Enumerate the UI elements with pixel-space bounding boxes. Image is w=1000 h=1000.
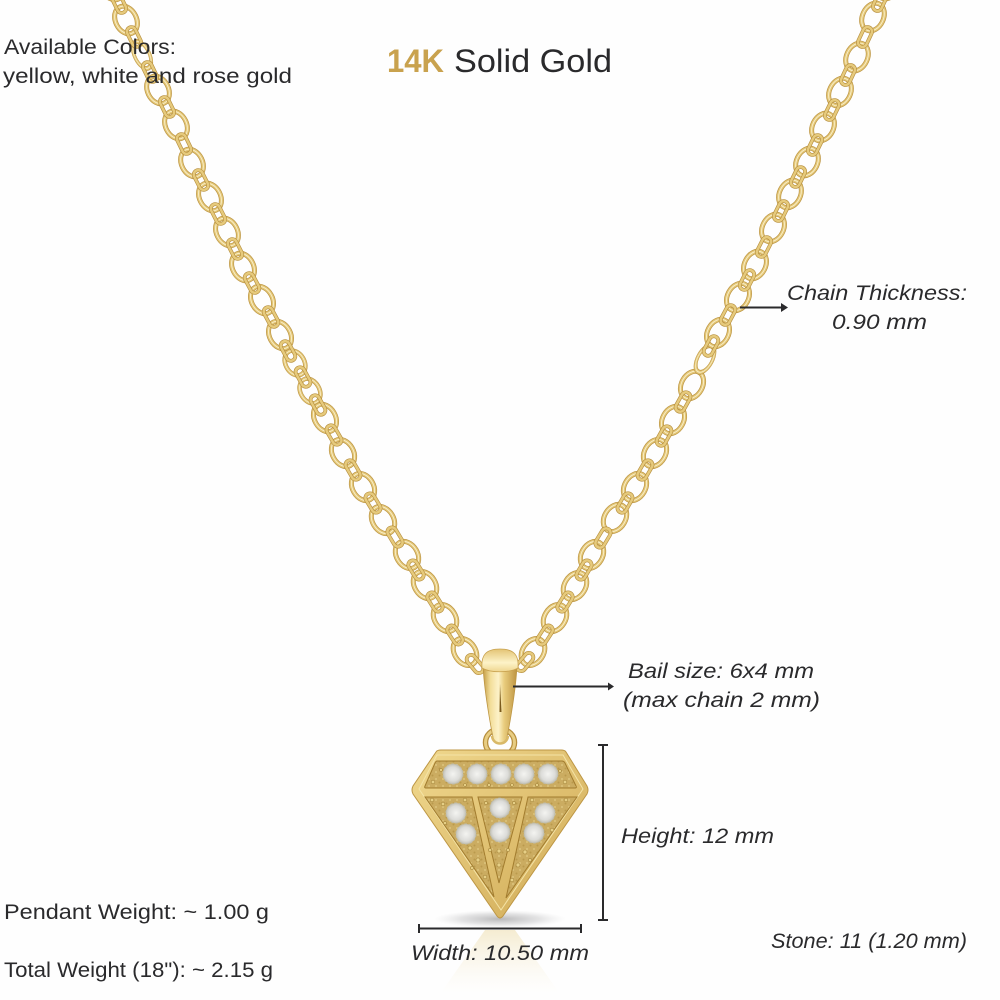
- right panel: [506, 797, 577, 898]
- total weight: Total Weight (18"): ~ 2.15 g: [4, 959, 273, 982]
- pendant shadow: [434, 910, 566, 928]
- bail: [483, 665, 517, 744]
- available colors: Available Colors:: [4, 36, 176, 59]
- panel beads: [430, 768, 568, 882]
- stone label: Stone: 11 (1.20 mm): [771, 930, 967, 953]
- height dimension: [598, 745, 608, 920]
- right chain: [515, 0, 904, 673]
- available colors: yellow, white and rose gold: [3, 65, 292, 88]
- chain thickness label: [787, 282, 967, 334]
- bail top: [482, 649, 518, 672]
- top band panel: [425, 761, 576, 788]
- bail center dark line: [500, 684, 502, 712]
- title: Solid Gold: [454, 43, 612, 79]
- width dimension: [419, 924, 581, 933]
- title: 14K: [387, 43, 444, 79]
- center panel: [478, 797, 522, 883]
- arrow: bail size: [513, 682, 614, 690]
- pendant weight: Pendant Weight: ~ 1.00 g: [4, 901, 269, 924]
- chain thickness label: Chain Thickness:: [787, 282, 967, 305]
- bail size label: (max chain 2 mm): [623, 689, 820, 712]
- left panel: [425, 797, 494, 897]
- stones: [443, 764, 558, 844]
- diamond frame: [412, 750, 588, 918]
- title: [387, 43, 612, 79]
- available colors: [3, 36, 292, 88]
- left chain: [96, 0, 485, 675]
- bail size label: Bail size: 6x4 mm: [628, 660, 814, 683]
- ring front: [492, 736, 508, 744]
- jump ring: [486, 730, 514, 756]
- bail size label: [623, 660, 820, 712]
- chain thickness label: 0.90 mm: [832, 311, 927, 334]
- pendant: diamond with bail: [412, 649, 588, 918]
- frame inner line: [419, 755, 583, 910]
- arrow: chain thickness: [740, 303, 788, 312]
- height label: Height: 12 mm: [621, 825, 774, 848]
- pendant reflection: [440, 930, 560, 994]
- width label: Width: 10.50 mm: [411, 942, 589, 965]
